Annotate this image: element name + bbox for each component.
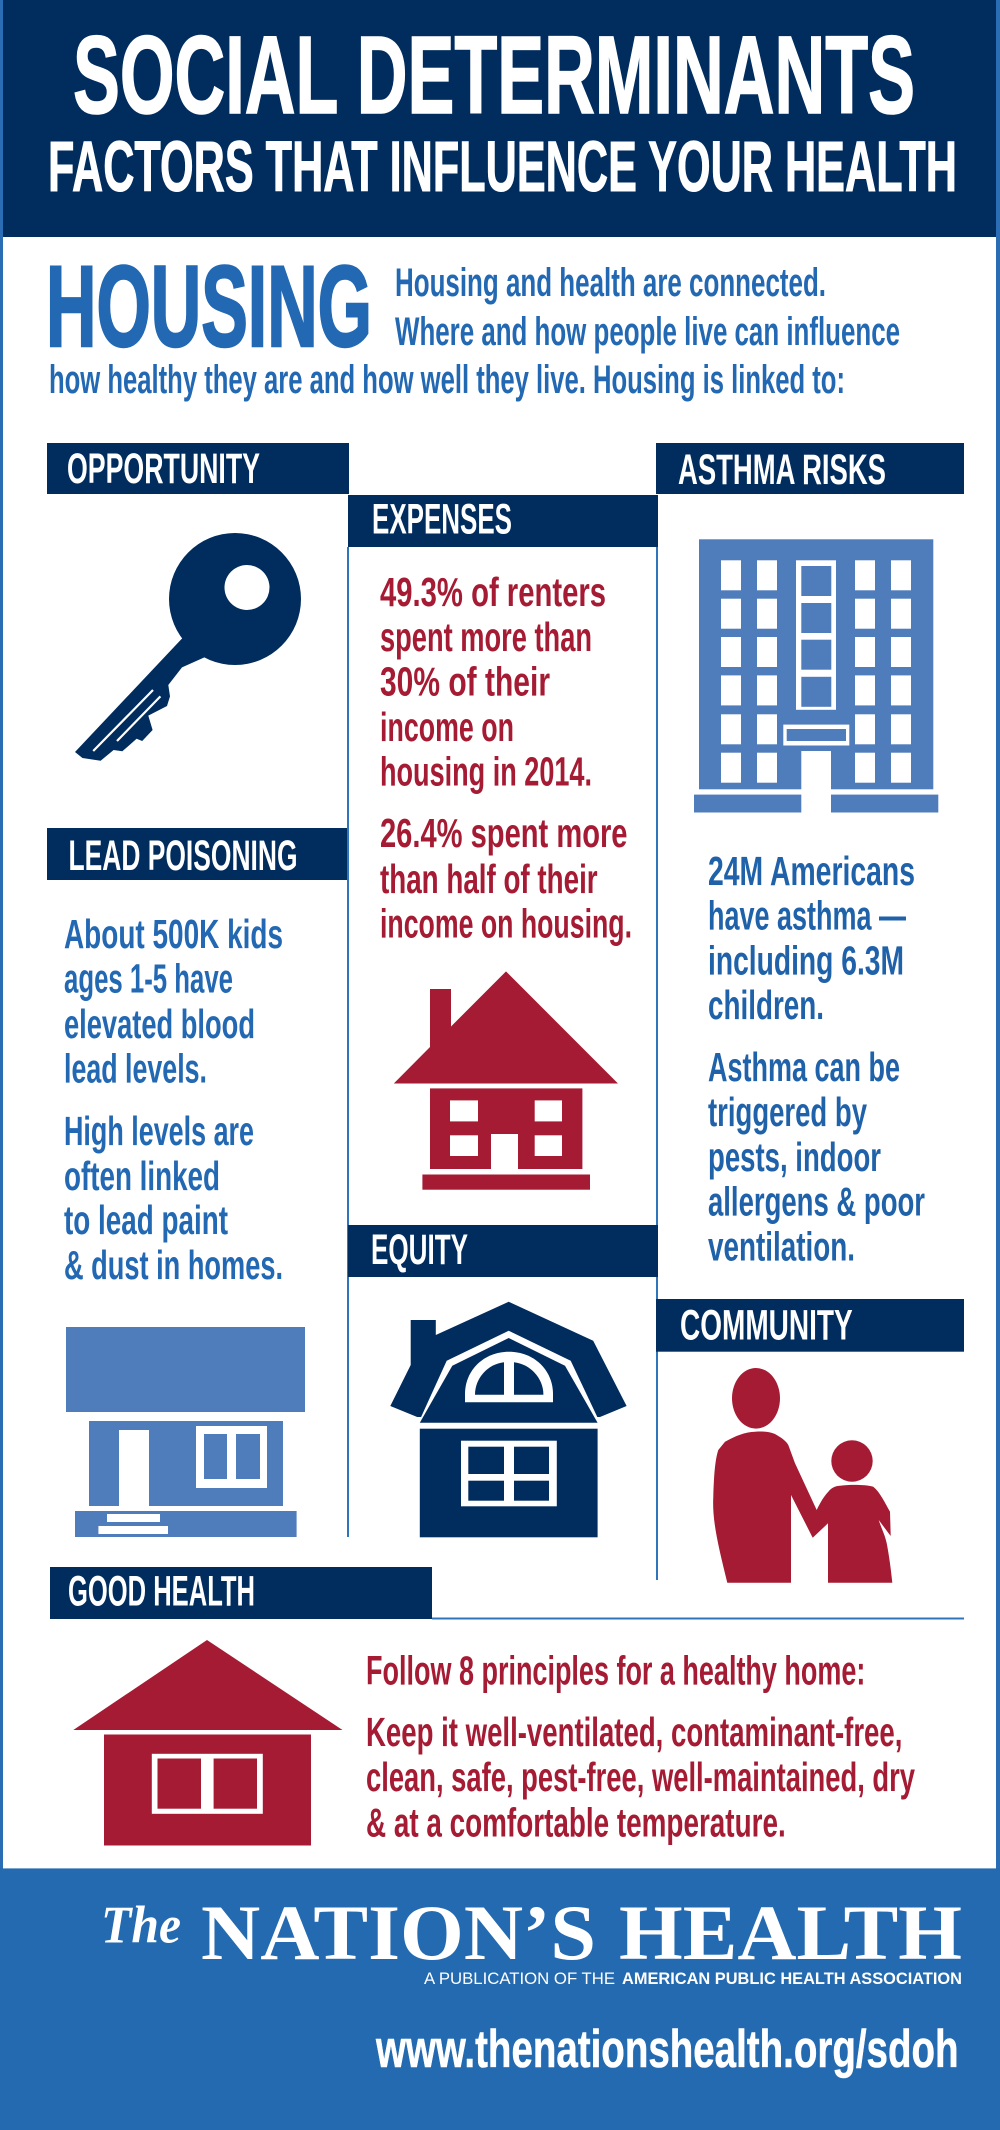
text: lead statistics: often linked xyxy=(64,1153,220,1199)
heading: expenses: EXPENSES xyxy=(372,496,512,544)
panel: housing introduction xyxy=(46,243,900,402)
heading: lead poisoning xyxy=(47,828,348,880)
heading: opportunity: OPPORTUNITY xyxy=(67,445,260,493)
heading: lead poisoning: LEAD POISONING xyxy=(68,832,298,880)
text: lead statistics: elevated blood xyxy=(64,1001,255,1047)
heading: housing: HOUSING xyxy=(46,243,372,371)
text: expenses statistics xyxy=(380,569,632,946)
text: asthma statistics: ventilation. xyxy=(708,1224,855,1270)
heading: community: COMMUNITY xyxy=(680,1301,853,1349)
panel: good health xyxy=(50,1567,964,1846)
text: healthy home principles: & at a comfortable temperature. xyxy=(366,1799,786,1845)
text: asthma statistics: triggered by xyxy=(708,1089,867,1135)
text: lead statistics: lead levels. xyxy=(64,1046,207,1092)
text: expenses statistics: income on housing. xyxy=(380,900,632,946)
text: expenses statistics: housing in 2014. xyxy=(380,749,592,795)
text: expenses statistics: 30% of their xyxy=(380,658,550,704)
text: expenses statistics: spent more than xyxy=(380,614,592,660)
text: lead statistics xyxy=(64,911,283,1288)
text: lead statistics: ages 1-5 have xyxy=(64,955,233,1001)
icon: light blue house xyxy=(66,1327,305,1537)
text: asthma statistics: pests, indoor xyxy=(708,1134,881,1180)
panel: community xyxy=(656,1299,964,1583)
heading: equity xyxy=(348,1225,658,1277)
panel: asthma risks xyxy=(656,443,964,1270)
heading: asthma risks: ASTHMA RISKS xyxy=(678,446,886,494)
icon: key xyxy=(75,533,301,761)
text: lead statistics: & dust in homes. xyxy=(64,1242,283,1288)
heading: equity: EQUITY xyxy=(371,1226,468,1274)
heading: good health: GOOD HEALTH xyxy=(68,1568,255,1616)
tagline: AMERICAN PUBLIC HEALTH ASSOCIATION xyxy=(622,1969,962,1988)
panel: title banner xyxy=(3,0,996,237)
text: expenses statistics: income on xyxy=(380,704,514,750)
icon: adult and child xyxy=(713,1368,892,1583)
tagline xyxy=(424,1969,962,1988)
text: lead statistics: to lead paint xyxy=(64,1197,228,1243)
text: healthy home principles xyxy=(366,1647,915,1845)
icon: navy barn house xyxy=(390,1302,627,1537)
logo: The Nation's Health: HEALTH xyxy=(619,1889,962,1976)
logo: The Nation's Health: NATION’S xyxy=(201,1889,596,1976)
text: asthma statistics: 24M Americans xyxy=(708,848,915,894)
icon: red house with window xyxy=(73,1640,343,1846)
icon: apartment building xyxy=(694,539,938,812)
panel: opportunity xyxy=(47,443,349,761)
text: asthma statistics: children. xyxy=(708,982,824,1028)
text: asthma statistics: Asthma can be xyxy=(708,1044,900,1090)
text: lead statistics: High levels are xyxy=(64,1108,254,1154)
text: expenses statistics: 49.3% of renters xyxy=(380,569,606,615)
panel: lead poisoning xyxy=(47,828,348,1537)
text: asthma statistics: including 6.3M xyxy=(708,938,904,984)
icon: red house with chimney xyxy=(394,971,618,1190)
logo: The Nation's Health: The xyxy=(101,1896,181,1954)
heading: expenses xyxy=(348,495,658,547)
text: asthma statistics xyxy=(708,848,925,1270)
logo: The Nation's Health xyxy=(101,1889,962,1976)
panel: footer xyxy=(0,1868,1000,2130)
text: lead statistics: About 500K kids xyxy=(64,911,283,957)
intro text xyxy=(49,261,900,402)
text: expenses statistics: than half of their xyxy=(380,856,598,902)
tagline: A PUBLICATION OF THE xyxy=(424,1969,615,1988)
text: expenses statistics: 26.4% spent more xyxy=(380,810,628,856)
panel: expenses xyxy=(348,495,658,1190)
panel: equity xyxy=(348,1225,658,1537)
text: asthma statistics: have asthma — xyxy=(708,892,906,938)
